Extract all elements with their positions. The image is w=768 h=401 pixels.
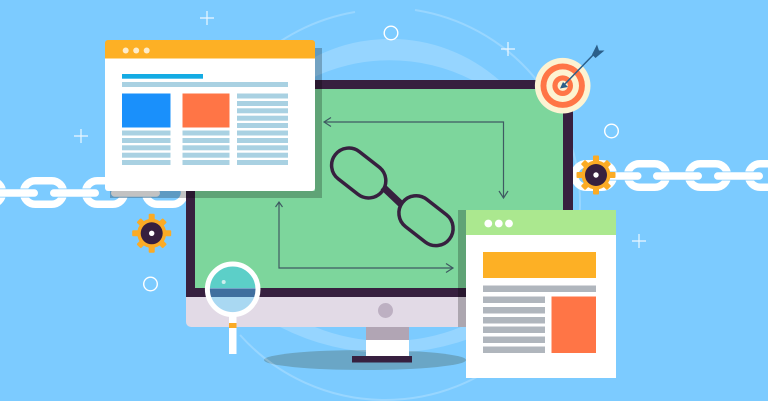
arrow: top connector <box>324 118 508 198</box>
window shadow <box>110 48 322 198</box>
window: right webpage <box>458 210 616 378</box>
grey text lines <box>483 286 596 353</box>
orange image block <box>552 296 596 353</box>
decorative plus signs <box>74 11 646 248</box>
icon: magnifying glass <box>207 263 258 354</box>
decorative small circles <box>144 26 618 291</box>
orange banner <box>483 252 596 278</box>
icon: target with arrow <box>535 44 604 114</box>
chain: left <box>0 181 184 204</box>
orange image block <box>182 94 230 128</box>
handle <box>229 314 236 354</box>
window body <box>466 235 616 378</box>
window body <box>105 58 315 191</box>
window dots <box>484 220 513 227</box>
monitor <box>186 80 573 362</box>
arrow: bottom connector <box>276 202 453 272</box>
monitor screen <box>195 89 563 288</box>
text lines <box>122 94 288 165</box>
window: left webpage <box>105 40 322 198</box>
icon: chain link <box>325 141 460 253</box>
window dots <box>123 48 150 54</box>
background rings <box>240 10 580 400</box>
icon: gear right <box>576 156 616 194</box>
lens <box>208 264 258 314</box>
monitor ground shadow <box>264 350 466 370</box>
monitor frame <box>186 80 573 297</box>
window shadow <box>458 210 466 327</box>
icon: gear left <box>132 214 171 253</box>
window header <box>466 210 616 235</box>
chain: right <box>574 164 768 187</box>
heading bar <box>122 74 203 79</box>
blue image block <box>122 94 170 128</box>
window header <box>105 40 315 58</box>
monitor chin <box>186 290 470 327</box>
monitor stand <box>366 327 409 340</box>
